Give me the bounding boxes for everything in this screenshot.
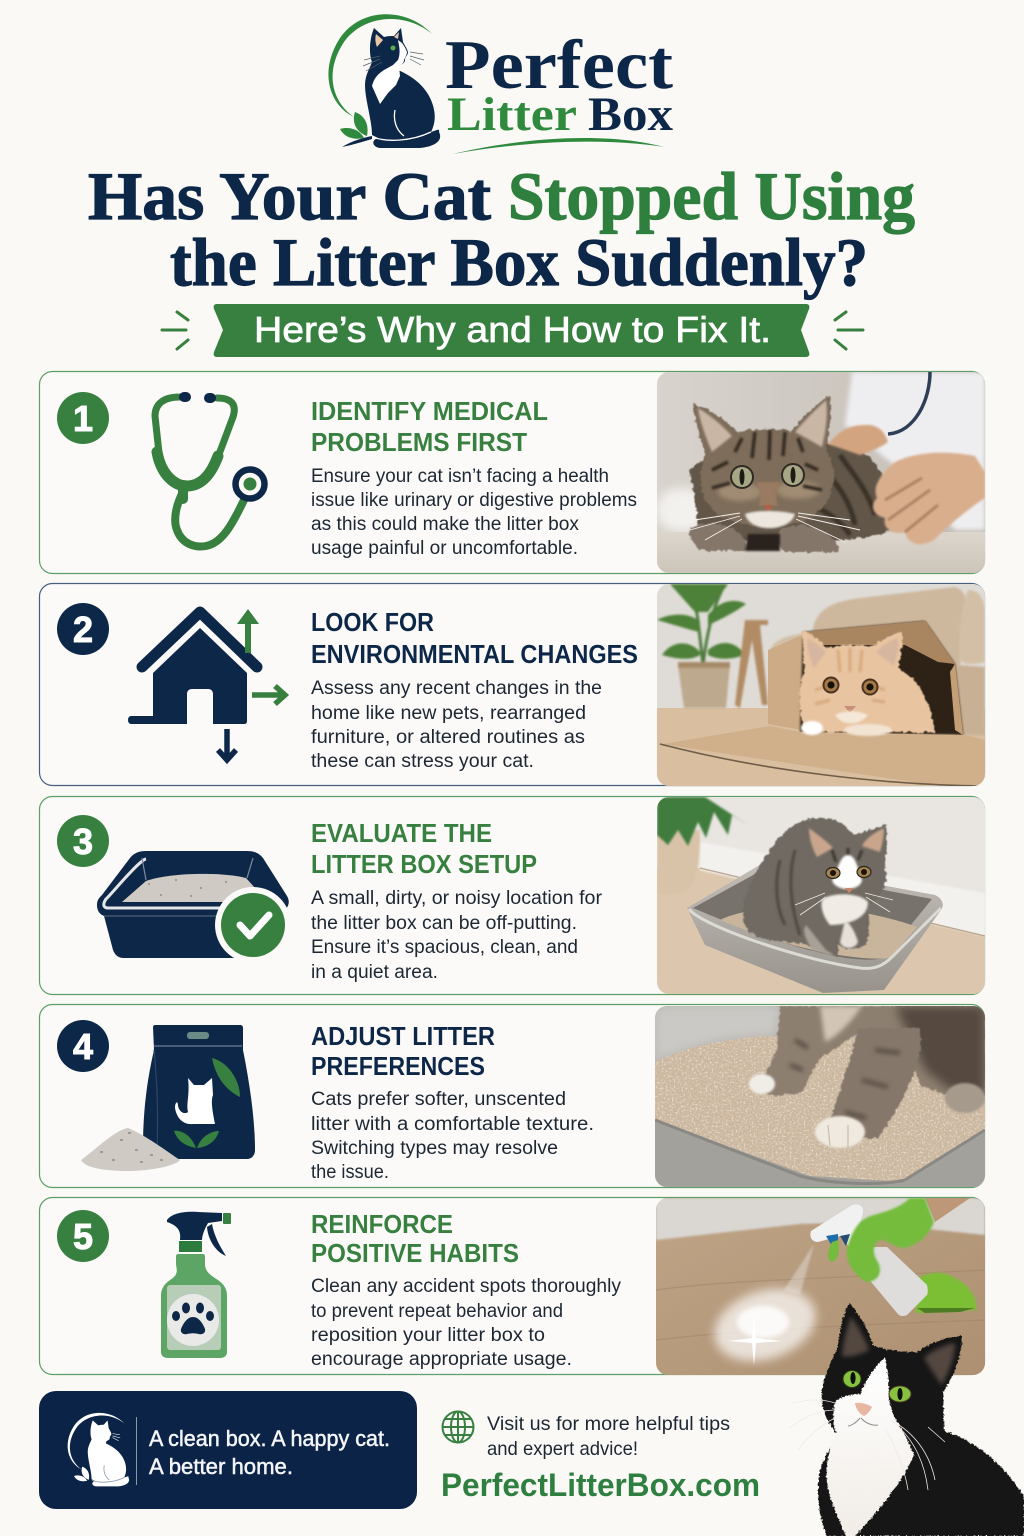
heading 4: ADJUST LITTER xyxy=(311,1021,495,1051)
sparks: ribbon accents xyxy=(162,312,863,349)
photo: vet examining tabby cat xyxy=(656,372,985,577)
heading 2: LOOK FOR xyxy=(311,607,434,637)
number badge 3: 3 xyxy=(73,821,93,862)
arrow down xyxy=(218,729,236,760)
tray xyxy=(687,863,943,993)
body text 4: Cats prefer softer, unscented xyxy=(311,1089,566,1110)
body text 1: issue like urinary or digestive problems xyxy=(311,490,637,511)
number badge 2 xyxy=(57,603,109,655)
body and legs xyxy=(757,1006,985,1100)
title: the Litter Box Suddenly? xyxy=(170,224,868,300)
body text 5: encourage appropriate usage. xyxy=(311,1349,572,1370)
body text 2: these can stress your cat. xyxy=(311,751,534,772)
spray mist xyxy=(784,1244,814,1295)
arrow right xyxy=(252,686,285,704)
icon: bag of litter xyxy=(81,1025,255,1171)
body text 5 xyxy=(311,1276,621,1370)
photo: cat in a steel litter tray xyxy=(657,797,985,994)
sofa xyxy=(770,632,804,676)
icon: spray bottle xyxy=(161,1212,231,1358)
whiskers xyxy=(790,1400,945,1490)
icon: white cat logo xyxy=(68,1413,129,1486)
cloth xyxy=(915,1273,976,1313)
panel: step 3 xyxy=(40,796,985,994)
card frame xyxy=(40,584,984,786)
logo wordmark: Litter: Litter xyxy=(447,88,577,141)
panel: step 2 xyxy=(40,584,985,788)
plant xyxy=(657,584,768,708)
nose xyxy=(855,1403,872,1416)
hand xyxy=(873,453,985,544)
body text 3: in a quiet area. xyxy=(311,962,438,983)
body text 2: Assess any recent changes in the xyxy=(311,678,602,699)
icon: litter box with check xyxy=(97,851,291,963)
box xyxy=(768,635,802,730)
card frame xyxy=(40,372,984,574)
number badge 1 xyxy=(57,392,109,444)
visit text: and expert advice! xyxy=(487,1438,638,1460)
heading 4: PREFERENCES xyxy=(311,1051,485,1081)
heading 3 xyxy=(311,818,537,879)
litter pile xyxy=(81,1128,180,1171)
heading 5: REINFORCE xyxy=(311,1209,453,1239)
number badge 5 xyxy=(57,1210,109,1262)
heading 3: EVALUATE THE xyxy=(311,818,492,848)
body text 4: litter with a comfortable texture. xyxy=(311,1114,594,1135)
icon: house with arrows xyxy=(128,609,285,760)
eyes xyxy=(843,1370,861,1388)
heading 1: PROBLEMS FIRST xyxy=(311,427,527,457)
number badge 1: 1 xyxy=(73,398,93,439)
icon: globe xyxy=(442,1411,474,1443)
body text 4: the issue. xyxy=(311,1162,389,1183)
body text 4: Switching types may resolve xyxy=(311,1138,558,1159)
logo: Perfect Litter Box xyxy=(328,14,673,154)
plant pot xyxy=(657,829,701,868)
panel: step 4 xyxy=(40,1004,985,1188)
number badge 2: 2 xyxy=(73,609,93,650)
arm xyxy=(925,1198,970,1222)
slogan: A clean box. A happy cat. xyxy=(149,1426,390,1451)
body text 1 xyxy=(311,466,637,559)
icon: logo leaves xyxy=(340,112,372,147)
heading 2 xyxy=(311,607,638,669)
slogan xyxy=(149,1426,390,1479)
photo: cat paws on litter xyxy=(655,1006,985,1187)
icon: stethoscope xyxy=(155,392,264,546)
number badge 5: 5 xyxy=(73,1216,93,1257)
heading 1 xyxy=(311,396,548,457)
heading 2: ENVIRONMENTAL CHANGES xyxy=(311,639,638,669)
body text 2 xyxy=(311,678,602,772)
photo: spraying cleaner on floor xyxy=(656,1198,985,1375)
body text 1: usage painful or uncomfortable. xyxy=(311,538,578,559)
number badge 4: 4 xyxy=(73,1026,93,1067)
white face blaze and chest xyxy=(826,1358,914,1536)
photo: tuxedo cat xyxy=(790,1303,1024,1536)
heading 5: POSITIVE HABITS xyxy=(311,1238,519,1268)
body text 3: the litter box can be off-putting. xyxy=(311,913,577,934)
title: Stopped Using xyxy=(508,158,915,234)
number badge 4 xyxy=(57,1020,109,1072)
bottle body xyxy=(870,1247,928,1316)
body text 1: as this could make the litter box xyxy=(311,514,579,535)
card frame xyxy=(40,796,984,994)
photo: orange cat in a cardboard box xyxy=(657,584,985,788)
subtitle ribbon xyxy=(214,304,809,357)
logo wordmark: Perfect: Perfect xyxy=(445,27,673,104)
body text 5: Clean any accident spots thoroughly xyxy=(311,1276,621,1297)
cat xyxy=(743,818,887,957)
footer banner xyxy=(39,1391,417,1509)
visit text xyxy=(487,1413,730,1460)
body text 3: A small, dirty, or noisy location for xyxy=(311,888,603,909)
body text 5: to prevent repeat behavior and xyxy=(311,1301,563,1322)
heading 1: IDENTIFY MEDICAL xyxy=(311,396,548,426)
body text 1: Ensure your cat isn’t facing a health xyxy=(311,466,609,487)
body text 2: home like new pets, rearranged xyxy=(311,703,586,724)
glove xyxy=(847,1198,934,1282)
heading 5 xyxy=(311,1209,519,1268)
title: Has Your Cat xyxy=(88,158,491,234)
head xyxy=(693,395,834,526)
body text 4 xyxy=(311,1089,594,1183)
panel: step 1 xyxy=(40,372,985,577)
body text 2: furniture, or altered routines as xyxy=(311,727,585,748)
heading 4 xyxy=(311,1021,495,1081)
arrow up xyxy=(237,609,259,653)
visit text: Visit us for more helpful tips xyxy=(487,1413,730,1435)
subtitle ribbon: Here’s Why and How to Fix It. xyxy=(254,309,771,350)
logo swoosh xyxy=(453,138,664,154)
title xyxy=(88,158,915,300)
number badge 3 xyxy=(57,815,109,867)
spray head xyxy=(810,1204,863,1246)
slogan: A better home. xyxy=(149,1454,293,1479)
card frame xyxy=(40,1198,984,1374)
divider xyxy=(136,1417,137,1485)
icon: logo cat xyxy=(363,28,440,148)
body text 3 xyxy=(311,888,603,983)
heading 3: LITTER BOX SETUP xyxy=(311,849,537,879)
icon: logo arc xyxy=(328,14,432,117)
cat xyxy=(800,630,935,732)
card frame xyxy=(40,1004,984,1188)
logo wordmark: Box: Box xyxy=(588,88,673,141)
panel: step 5 xyxy=(40,1198,985,1375)
body text 3: Ensure it’s spacious, clean, and xyxy=(311,937,578,958)
website url: PerfectLitterBox.com xyxy=(441,1467,760,1503)
body text 5: reposition your litter box to xyxy=(311,1325,545,1346)
